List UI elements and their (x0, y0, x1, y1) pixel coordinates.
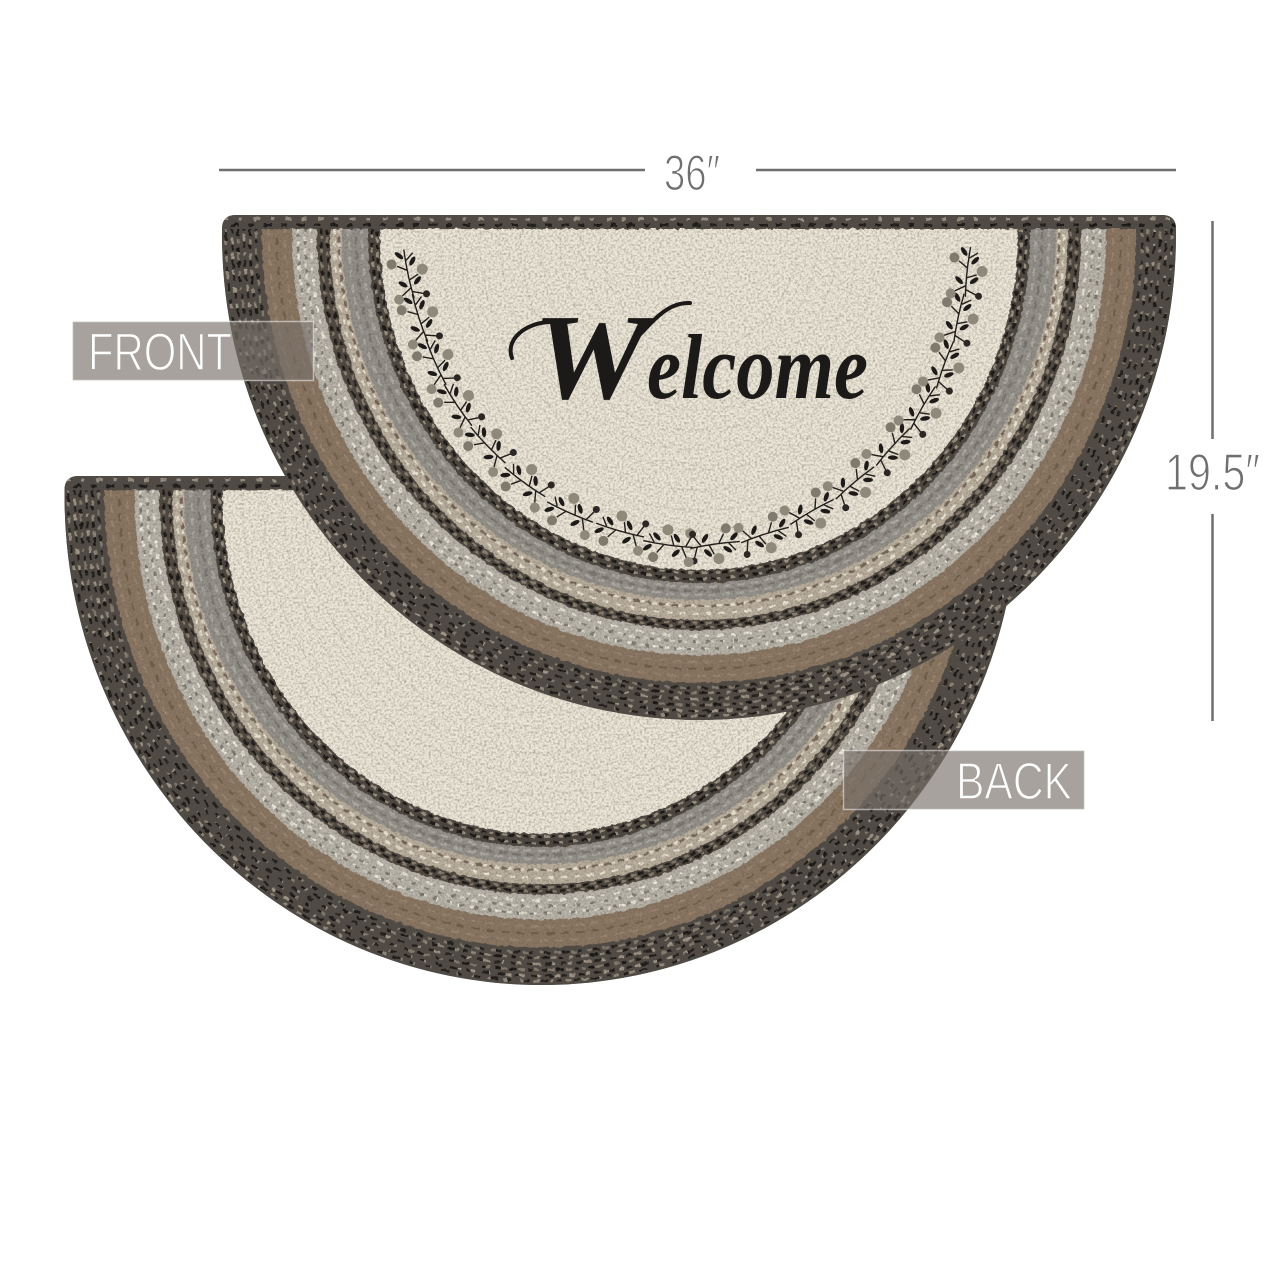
floral vine border (384, 245, 990, 568)
welcome lettering: elcome (647, 316, 868, 418)
back tag (844, 750, 1084, 811)
rug: front side (200, 205, 1198, 742)
front tag: FRONT (88, 323, 232, 382)
width dimension line (219, 169, 1176, 171)
welcome lettering: W (533, 290, 656, 425)
height dimension line (1211, 221, 1214, 721)
back tag: BACK (956, 753, 1072, 811)
width label: 36″ (664, 145, 720, 201)
welcome lettering (511, 290, 868, 425)
rug: back side (42, 466, 1040, 1007)
